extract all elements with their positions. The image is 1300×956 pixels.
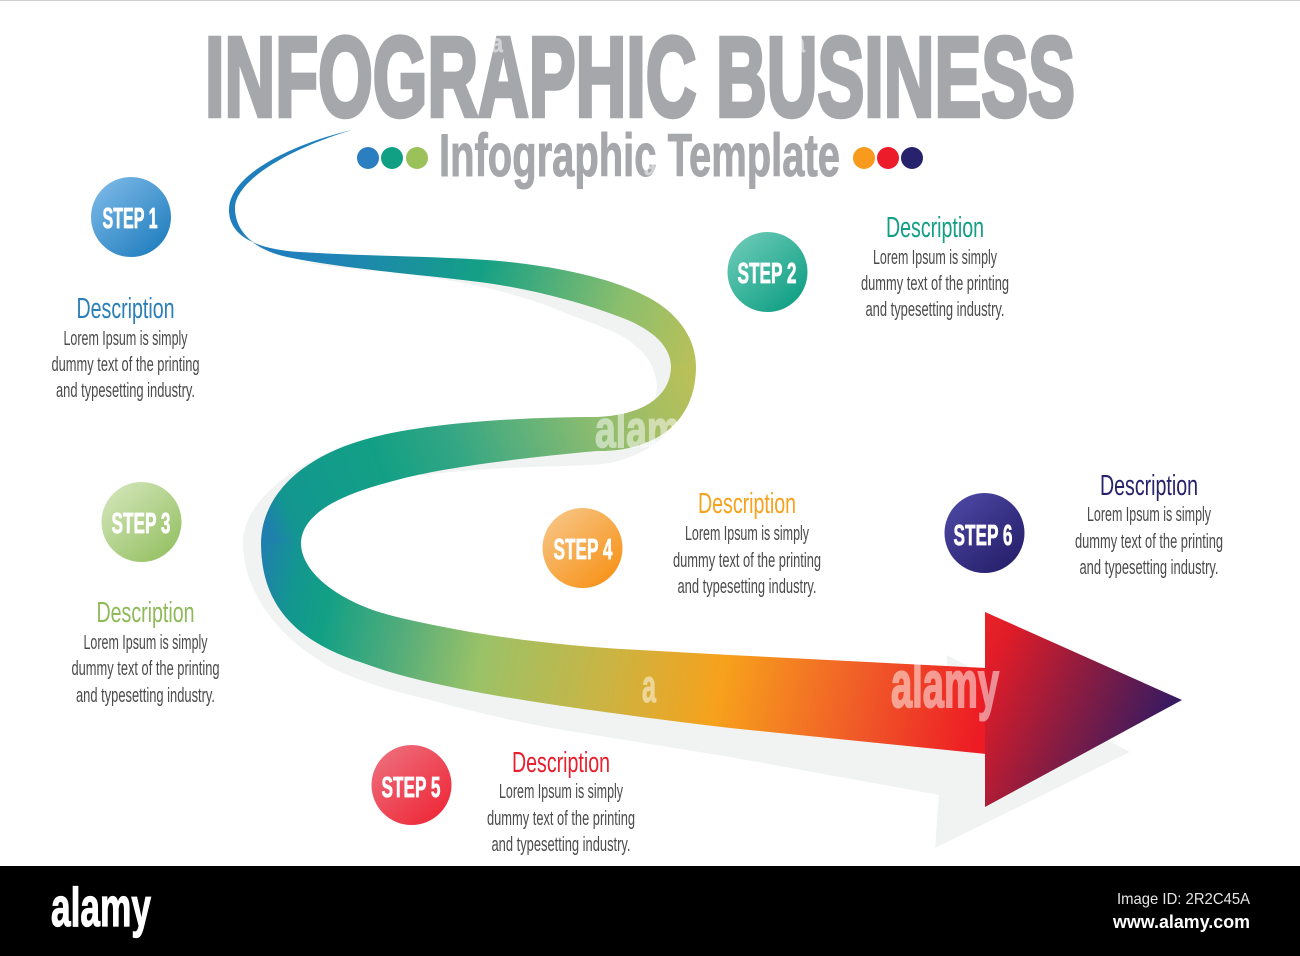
step 2 description: Lorem Ipsum is simply xyxy=(873,247,997,269)
watermarks: a xyxy=(491,28,503,58)
step 3 description: Description xyxy=(96,597,194,629)
step 6 description: dummy text of the printing xyxy=(1075,531,1223,553)
ribbon: upper segment xyxy=(229,130,696,367)
ribbon: middle segment xyxy=(261,366,696,544)
watermarks: a xyxy=(793,28,805,58)
step 6 description: and typesetting industry. xyxy=(1080,557,1218,579)
step 5 xyxy=(372,745,452,825)
image id: Image ID: 2R2C45A xyxy=(1117,891,1250,908)
step 4 description: Lorem Ipsum is simply xyxy=(685,523,809,545)
step 1 description: dummy text of the printing xyxy=(52,354,200,376)
step 6 xyxy=(944,493,1024,573)
step 6: STEP 6 xyxy=(954,520,1012,552)
step 5 description: dummy text of the printing xyxy=(487,808,635,830)
step 3: STEP 3 xyxy=(112,508,170,540)
watermarks xyxy=(491,28,999,721)
step 2 description: and typesetting industry. xyxy=(866,299,1004,321)
footer logo: alamy xyxy=(51,876,151,938)
step 1 description: and typesetting industry. xyxy=(56,380,195,402)
footer bar xyxy=(0,866,1300,956)
step 5 description: Lorem Ipsum is simply xyxy=(499,781,623,803)
step 1: STEP 1 xyxy=(102,203,158,235)
watermarks: alam xyxy=(595,401,680,459)
step 4: STEP 4 xyxy=(554,534,612,566)
arrow shadow xyxy=(236,212,1130,848)
step 2 description: dummy text of the printing xyxy=(861,273,1009,295)
step 2 xyxy=(728,232,808,312)
step 4 description: Description xyxy=(698,488,796,520)
watermarks: a xyxy=(642,660,656,712)
arrow head xyxy=(985,612,1182,807)
step 6 description xyxy=(1075,470,1223,579)
watermarks: a xyxy=(644,151,656,181)
step 5 description xyxy=(487,747,635,856)
step 3 description xyxy=(72,597,220,707)
step 3 description: and typesetting industry. xyxy=(76,685,215,707)
step 3 description: dummy text of the printing xyxy=(72,658,220,680)
step 5 description: Description xyxy=(512,747,610,779)
step 2 description: Description xyxy=(886,212,984,244)
step 2 description xyxy=(861,212,1009,321)
website: www.alamy.com xyxy=(1112,912,1250,932)
decorative dots left xyxy=(357,147,428,169)
step 4 description: dummy text of the printing xyxy=(673,550,821,572)
step 4 description xyxy=(673,488,821,598)
step 5 description: and typesetting industry. xyxy=(492,834,630,856)
step 1 description xyxy=(52,293,200,402)
step 1 description: Lorem Ipsum is simply xyxy=(64,328,188,350)
ribbon: lower segment xyxy=(261,543,986,754)
step 6 description: Description xyxy=(1100,470,1198,502)
decorative dots right xyxy=(853,147,923,169)
step 3 xyxy=(102,482,182,562)
winding arrow ribbon xyxy=(229,130,1182,807)
step 1 description: Description xyxy=(76,293,174,325)
step 3 description: Lorem Ipsum is simply xyxy=(84,632,208,654)
subtitle: Infographic Template xyxy=(439,122,840,189)
top edge line xyxy=(0,0,1300,1)
step 2: STEP 2 xyxy=(738,258,796,290)
step 6 description: Lorem Ipsum is simply xyxy=(1087,504,1211,526)
step 5: STEP 5 xyxy=(382,772,440,804)
step 4 description: and typesetting industry. xyxy=(678,576,816,598)
step 1 xyxy=(91,177,171,257)
step 4 xyxy=(542,508,622,588)
watermarks: alamy xyxy=(891,647,999,721)
